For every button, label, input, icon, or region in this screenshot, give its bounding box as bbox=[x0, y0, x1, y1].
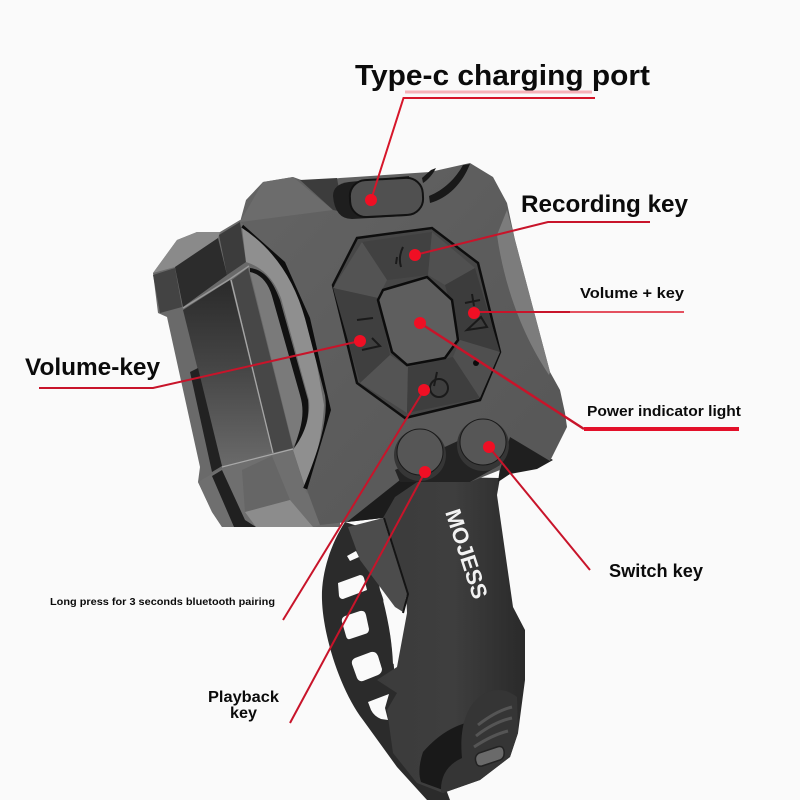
flap bbox=[348, 518, 407, 612]
octagonal button pad bbox=[333, 228, 500, 418]
lower left strips bbox=[198, 450, 340, 527]
callout: playback key: key bbox=[230, 705, 257, 722]
mounting arm with MOJESS logo bbox=[347, 476, 525, 793]
top left block bbox=[153, 268, 182, 313]
callout: long press bluetooth pairing: Long press for 3 seconds bluetooth pairing bbox=[50, 596, 275, 608]
callout: switch key bbox=[483, 441, 703, 581]
top bevel bbox=[240, 177, 333, 222]
top curved edge bbox=[153, 232, 220, 273]
callout: volume + key: Volume + key bbox=[580, 285, 685, 302]
callout: playback key: Playback bbox=[208, 689, 279, 706]
silhouette bbox=[153, 220, 340, 527]
product: bike horn device bbox=[153, 163, 567, 800]
type-c port cover bbox=[333, 176, 424, 219]
round switch buttons bbox=[394, 419, 509, 482]
callout: power indicator light: Power indicator light bbox=[587, 404, 741, 420]
groove bbox=[243, 225, 329, 489]
dark wedge under plate bbox=[498, 432, 553, 482]
buckle bbox=[419, 720, 483, 790]
callout: switch key: Switch key bbox=[609, 561, 703, 581]
front plate bbox=[240, 163, 567, 525]
rubber strap loop bbox=[322, 522, 450, 800]
left black strip bbox=[190, 368, 222, 472]
callout: type-c charging port bbox=[355, 60, 650, 206]
callout: volume + key bbox=[468, 285, 685, 319]
top corner bbox=[219, 222, 246, 275]
callout: power indicator light bbox=[414, 317, 741, 429]
right highlight bbox=[497, 210, 550, 375]
top slots bbox=[429, 164, 470, 203]
callout: recording key bbox=[409, 191, 689, 261]
pad segments bbox=[362, 232, 432, 280]
main panel bbox=[183, 280, 272, 467]
right strip bbox=[232, 268, 293, 453]
logo text: MOJESS bbox=[440, 506, 493, 602]
callout: recording key: Recording key bbox=[521, 191, 689, 218]
callout: long press bluetooth pairing bbox=[50, 384, 430, 620]
callout: type-c charging port: Type-c charging port bbox=[355, 60, 650, 92]
centre button bbox=[378, 277, 458, 365]
textured inset bbox=[250, 272, 307, 446]
key glyphs bbox=[357, 247, 487, 397]
callout: volume- key bbox=[25, 335, 366, 388]
callout: playback key bbox=[208, 466, 431, 723]
callout: volume- key: Volume-key bbox=[25, 354, 161, 381]
side housing bbox=[153, 220, 340, 527]
light band bbox=[242, 227, 324, 490]
top dark cap bbox=[175, 238, 227, 307]
